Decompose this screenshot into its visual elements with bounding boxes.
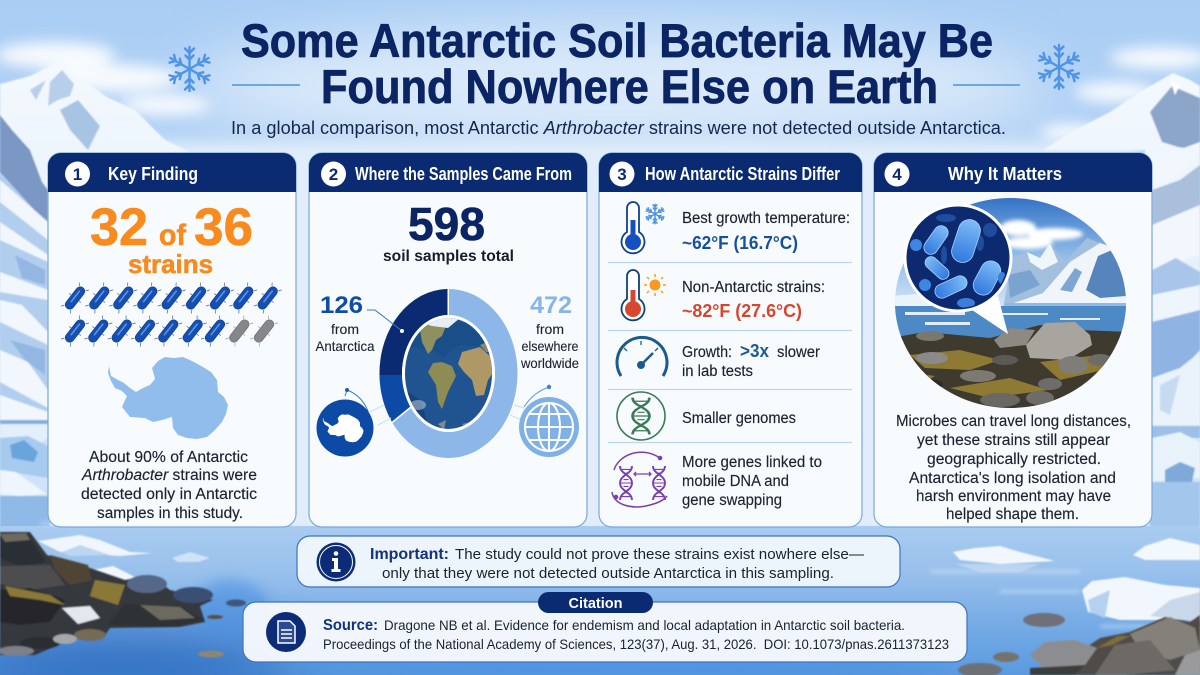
why it matters text — [896, 413, 1131, 523]
why it matters text: Antarctica's long isolation and — [909, 470, 1116, 487]
icon: right snowflake — [1038, 45, 1080, 89]
big stat: 32 of 36 strains: of — [159, 219, 187, 252]
panel 3 header: 3 — [617, 165, 627, 184]
panel 4 header: Why It Matters — [948, 164, 1062, 184]
big stat: 32 of 36 strains: strains — [128, 249, 213, 279]
shore rocks left — [0, 532, 246, 658]
panel: why it matters — [874, 153, 1152, 527]
icon: info — [316, 542, 356, 582]
citation pill — [538, 592, 653, 613]
key finding text: detected only in Antarctic — [81, 486, 257, 503]
important text: Important: — [370, 546, 449, 563]
callout: 472 from elsewhere: from — [536, 321, 564, 337]
stat: more mobile genes: More genes linked to — [682, 454, 822, 471]
panel 4 header — [874, 153, 1152, 192]
stat: smaller genomes: Smaller genomes — [682, 410, 796, 427]
callout: 472 from elsewhere: worldwide — [520, 355, 579, 371]
important text — [370, 546, 864, 582]
stat: more mobile genes: gene swapping — [682, 492, 782, 509]
callout: 126 from Antarctica: from — [331, 321, 359, 337]
why it matters text: geographically restricted. — [927, 451, 1101, 468]
title: Some Antarctic Soil Bacteria May Be — [241, 14, 993, 67]
stat: more mobile genes: mobile DNA and — [682, 473, 789, 490]
stat: growth: slower — [777, 344, 820, 361]
big stat: 32 of 36 strains: 36 — [194, 198, 253, 257]
citation pill: Citation — [569, 596, 622, 612]
globe photo — [400, 315, 500, 435]
icon: DNA circle — [617, 392, 665, 440]
callout: 472 from elsewhere: 472 — [530, 292, 572, 319]
panel 2 header: 2 — [329, 165, 338, 184]
map: Antarctica — [108, 357, 228, 439]
icon: warm thermometer — [622, 270, 666, 320]
key finding text: About 90% of Antarctic — [89, 449, 248, 466]
stat: growth: >3x — [740, 341, 769, 361]
source text: Dragone NB et al. Evidence for endemism and local adaptation in Antarctic soil bacteria. — [384, 617, 905, 633]
callout: 126 from Antarctica: Antarctica — [316, 338, 375, 354]
panel 1 header — [48, 153, 296, 192]
stat: non-Antarctic strains: ~82°F (27.6°C) — [682, 301, 802, 321]
stat: non-Antarctic strains: Non-Antarctic strains: — [682, 279, 825, 296]
icon: cold thermometer — [622, 202, 664, 253]
stat: best growth temperature — [682, 210, 850, 253]
panel 3 header — [599, 153, 862, 192]
key finding text: Arthrobacter strains were — [81, 467, 257, 484]
panel 2 header: Where the Samples Came From — [355, 164, 572, 184]
total label: soil samples total — [383, 248, 514, 265]
why it matters text: yet these strains still appear — [917, 432, 1110, 449]
citation box — [243, 592, 967, 662]
big stat: 32 of 36 strains — [90, 198, 253, 279]
stat: best growth temperature: ~62°F (16.7°C) — [682, 233, 798, 253]
icon: gauge — [617, 337, 667, 376]
stat: growth: in lab tests — [682, 363, 753, 380]
bacteria pictogram — [60, 282, 283, 347]
ice floes — [38, 535, 1200, 622]
important text: The study could not prove these strains exist nowhere else— — [455, 546, 864, 563]
icon: gene swapping — [612, 452, 667, 507]
stat: more mobile genes — [682, 454, 822, 509]
big stat: 32 of 36 strains: 32 — [90, 198, 148, 257]
icon: document — [266, 612, 306, 652]
callout: 472 from elsewhere — [520, 292, 579, 371]
panel 1 header: 1 — [73, 165, 82, 184]
icon: world globe disc — [510, 385, 579, 457]
title — [241, 14, 993, 113]
total: 598: 598 — [408, 198, 485, 250]
source text — [323, 617, 949, 652]
callout: 126 from Antarctica — [316, 292, 404, 354]
magnifier callout: bacteria — [905, 205, 1011, 334]
panel 2 header — [309, 153, 587, 192]
panel: how Antarctic strains differ — [599, 153, 862, 527]
key finding text — [81, 449, 257, 522]
stat: best growth temperature: Best growth temperature: — [682, 210, 850, 227]
important text: only that they were not detected outside Antarctica in this sampling. — [382, 565, 834, 582]
panel 1 header: Key Finding — [108, 164, 198, 184]
callout: 126 from Antarctica: 126 — [320, 292, 363, 319]
title: Found Nowhere Else on Earth — [321, 60, 938, 113]
panel 4 header: 4 — [892, 165, 902, 184]
stat: non-Antarctic strains — [682, 279, 825, 321]
panel: where the samples came from — [309, 153, 587, 527]
left mountains — [0, 62, 190, 528]
source text: Proceedings of the National Academy of Sciences, 123(37), Aug. 31, 2026. DOI: 10.1073/pnas.2611373123 — [323, 636, 949, 652]
why it matters text: helped shape them. — [946, 506, 1079, 523]
subtitle: In a global comparison, most Antarctic Arthrobacter strains were not detected outside Antarctica. — [231, 118, 1006, 138]
icon: Antarctica disc — [316, 388, 391, 456]
right mountains — [1043, 73, 1200, 528]
panel 3 header: How Antarctic Strains Differ — [645, 164, 840, 184]
icon: left snowflake — [168, 47, 211, 91]
callout: 472 from elsewhere: elsewhere — [522, 338, 579, 354]
panel: key finding — [48, 153, 296, 527]
callout: important note — [297, 536, 900, 587]
key finding text: samples in this study. — [97, 505, 243, 522]
shore rocks right — [958, 613, 1200, 675]
why it matters text: harsh environment may have — [916, 488, 1111, 505]
why it matters text: Microbes can travel long distances, — [896, 413, 1131, 430]
stat: growth: Growth: — [682, 344, 732, 361]
source text: Source: — [323, 617, 378, 634]
Antarctic landscape photo — [890, 195, 1130, 410]
stat: growth — [682, 341, 820, 380]
donut chart — [379, 289, 517, 458]
sea — [0, 526, 1200, 675]
